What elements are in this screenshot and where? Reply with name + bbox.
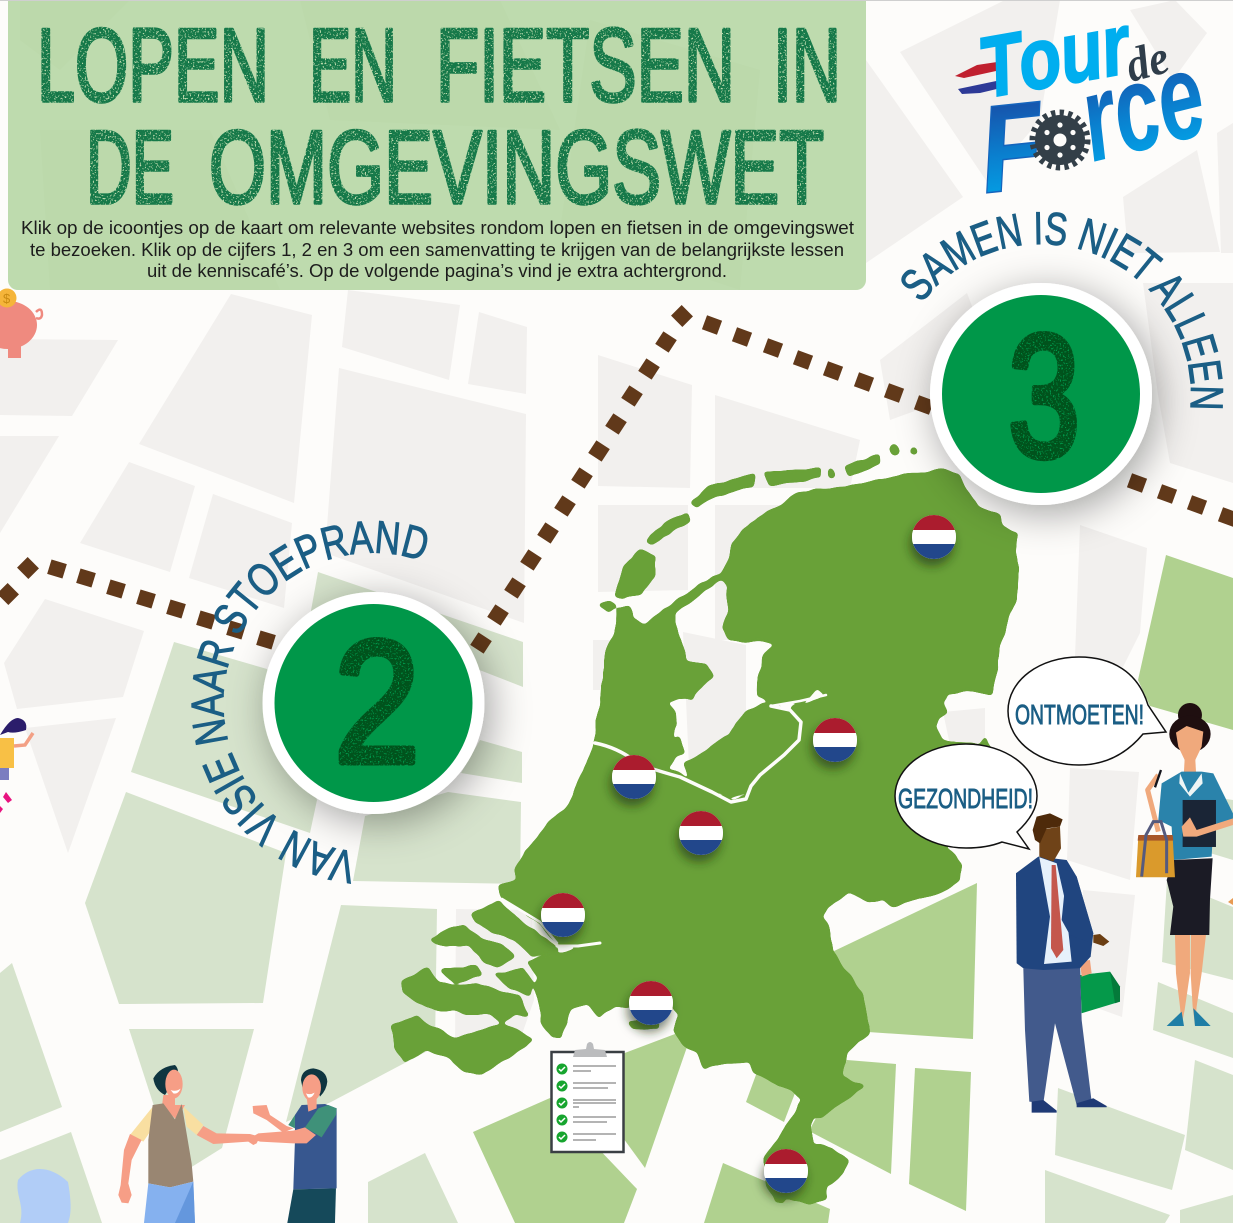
title: EN (309, 8, 397, 124)
collar (1179, 773, 1203, 797)
arm (1148, 775, 1158, 832)
illustration: businesswoman (1136, 703, 1233, 1026)
right person (250, 1068, 337, 1223)
speech bubble: gezondheid (895, 744, 1037, 849)
icon: piggy bank: $ (3, 291, 11, 306)
shoes (1167, 1008, 1211, 1026)
hair (1033, 813, 1063, 843)
title (37, 8, 841, 226)
illustration: running girl (0, 718, 33, 813)
intro text (21, 218, 854, 281)
number 2 circle (262, 592, 484, 814)
digit 3: 3 (1008, 298, 1080, 493)
briefcase (1080, 972, 1120, 1013)
intro text: te bezoeken. Klik op de cijfers 1, 2 en 3 om een samenvatting te krijgen van de belangrijkste lessen (30, 240, 844, 260)
illustration: orange hand at right edge (1228, 898, 1233, 905)
shirt (1039, 857, 1072, 964)
header panel (0, 0, 1233, 290)
map: Zeeland islands (393, 902, 786, 1201)
title: OMGEVINGSWET (209, 110, 824, 226)
speech bubble: gezondheid: GEZONDHEID! (898, 783, 1033, 814)
title: LOPEN (37, 8, 269, 124)
icon: cog (1032, 112, 1088, 168)
document folder (1183, 800, 1216, 847)
map of the Netherlands (393, 446, 1017, 1201)
map: Texel (617, 550, 654, 599)
shoes (1032, 1098, 1107, 1113)
title: DE (86, 110, 174, 226)
title: IN (773, 8, 841, 124)
head (1039, 827, 1061, 862)
blouse (1158, 772, 1233, 860)
logo: Tour de Force (955, 0, 1218, 220)
icon: water pond (17, 1169, 71, 1223)
trousers (1023, 962, 1092, 1105)
hand (1093, 934, 1109, 946)
flags on the map (541, 515, 956, 1193)
map: Flevoland (685, 705, 799, 797)
dotted route (0, 305, 1233, 654)
hair (1169, 703, 1211, 752)
handbag (1136, 822, 1175, 877)
speech bubble: ontmoeten (1008, 657, 1166, 765)
logo: Tour de Force: de (1120, 31, 1174, 93)
illustration: two people shaking hands (118, 1065, 337, 1223)
jacket (1016, 857, 1093, 970)
neck and legs (1175, 753, 1206, 1025)
skirt (1167, 858, 1213, 935)
tie (1051, 865, 1063, 958)
face (1176, 726, 1203, 761)
title: FIETSEN (436, 8, 735, 124)
intro text: Klik op de icoontjes op de kaart om relevante websites rondom lopen en fietsen in de omgevingswet (21, 218, 854, 238)
sleeve (1062, 870, 1093, 943)
icon: clipboard checklist (552, 1042, 624, 1152)
logo: Tour de Force: F (973, 76, 1052, 220)
map: waterways (502, 695, 826, 946)
curved heading: van visie naar stoeprand: VAN VISIE NAAR STOEPRAND (191, 520, 428, 884)
digit 2: 2 (334, 604, 420, 799)
illustration: businessman (1016, 813, 1120, 1113)
intro text: uit de kenniscafé’s. Op de volgende pagina’s vind je extra achtergrond. (147, 261, 727, 281)
speech bubble: ontmoeten: ONTMOETEN! (1015, 699, 1144, 730)
pen (1155, 770, 1161, 787)
icon: piggy bank (0, 288, 42, 358)
map: Wadden islands (600, 446, 917, 611)
hand (1182, 817, 1233, 837)
curved heading: samen is niet alleen: SAMEN IS NIET ALLEEN (901, 212, 1224, 408)
left person (118, 1065, 260, 1223)
number 3 circle (930, 283, 1152, 505)
